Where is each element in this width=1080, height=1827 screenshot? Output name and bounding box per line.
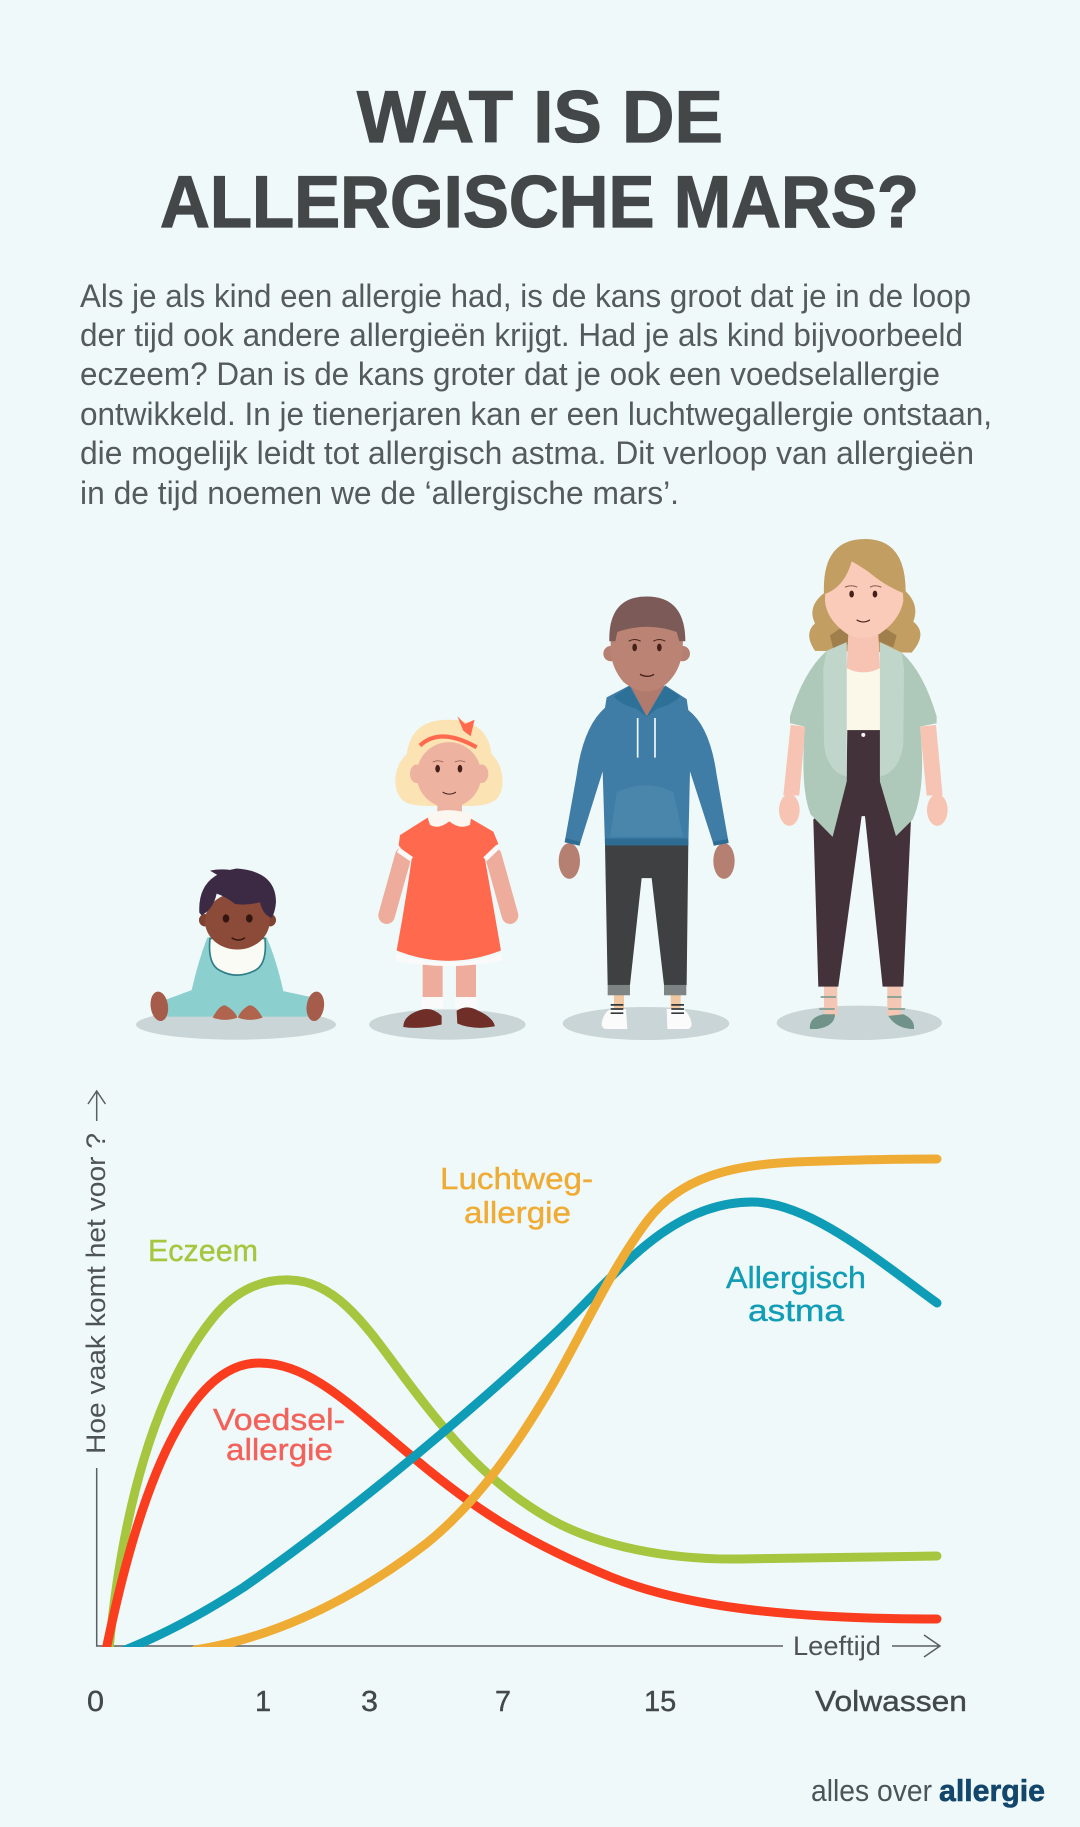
x axis ticks: 7	[495, 1686, 511, 1718]
label: voedselallergie: Voedsel-	[213, 1402, 345, 1437]
title: WAT IS DE	[357, 77, 723, 158]
intro paragraph: eczeem? Dan is de kans groter dat je ook een voedselallergie	[80, 356, 940, 392]
illustration: teenage boy	[559, 596, 735, 1040]
label: voedselallergie	[213, 1402, 345, 1467]
y axis label: Hoe vaak komt het voor ?	[81, 1133, 111, 1454]
x axis ticks: Volwassen	[815, 1686, 967, 1718]
chart axes	[88, 1091, 940, 1657]
title	[160, 77, 919, 243]
logo	[811, 1773, 1045, 1808]
line chart curves	[106, 1159, 937, 1650]
label: allergisch astma: astma	[748, 1293, 845, 1328]
label: allergisch astma	[726, 1260, 866, 1328]
curve: allergisch astma	[125, 1202, 937, 1650]
label: luchtwegallergie	[440, 1161, 593, 1230]
illustration: adult woman	[777, 539, 948, 1040]
x axis ticks: 3	[361, 1686, 378, 1718]
x axis label: Leeftijd	[793, 1631, 881, 1661]
logo: allergie	[939, 1773, 1045, 1808]
label: voedselallergie: allergie	[226, 1432, 333, 1467]
title: ALLERGISCHE MARS?	[160, 162, 919, 243]
curve: eczeem	[109, 1280, 937, 1650]
intro paragraph: Als je als kind een allergie had, is de kans groot dat je in de loop	[80, 278, 971, 314]
intro paragraph: der tijd ook andere allergieën krijgt. Had je als kind bijvoorbeeld	[80, 317, 963, 353]
intro paragraph: ontwikkeld. In je tienerjaren kan er een luchtwegallergie ontstaan,	[80, 396, 992, 432]
label: luchtwegallergie: Luchtweg-	[440, 1161, 593, 1196]
x axis ticks: 1	[255, 1686, 271, 1718]
curve: luchtwegallergie	[195, 1159, 937, 1650]
logo: alles over	[811, 1773, 932, 1808]
x axis ticks	[87, 1686, 967, 1718]
label: eczeem: Eczeem	[148, 1233, 258, 1268]
intro paragraph: in de tijd noemen we de ‘allergische mars’.	[80, 475, 679, 511]
illustration: baby	[136, 869, 336, 1040]
illustration: toddler girl	[369, 716, 526, 1040]
x axis ticks: 15	[644, 1686, 676, 1718]
label: luchtwegallergie: allergie	[464, 1195, 571, 1230]
curve: voedselallergie	[106, 1363, 937, 1650]
x axis ticks: 0	[87, 1686, 104, 1718]
intro paragraph	[80, 278, 992, 511]
label: allergisch astma: Allergisch	[726, 1260, 866, 1295]
intro paragraph: die mogelijk leidt tot allergisch astma. Dit verloop van allergieën	[80, 435, 974, 471]
